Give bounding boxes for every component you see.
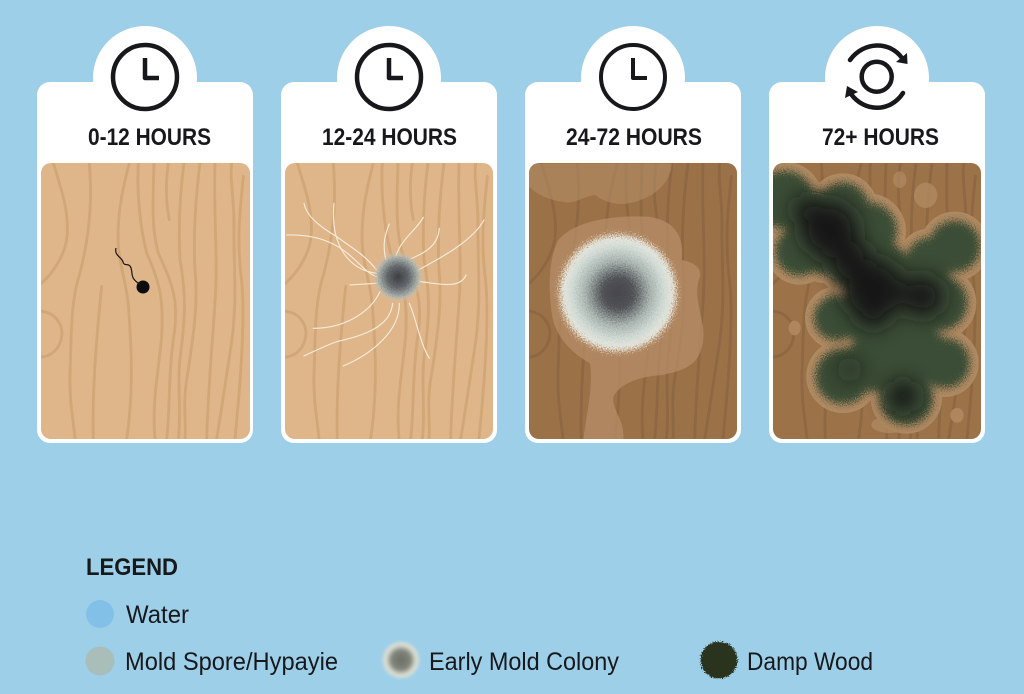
- card shape: [769, 26, 985, 443]
- heading: 12-24 HOURS: [322, 124, 457, 151]
- legend: [86, 554, 873, 678]
- card shape: [37, 26, 253, 443]
- legend item: early mold colony: [383, 642, 619, 678]
- legend heading: LEGEND: [86, 554, 178, 581]
- heading: 24-72 HOURS: [566, 124, 702, 151]
- legend item: water: Water: [126, 601, 189, 629]
- icon: clock: [357, 45, 421, 109]
- legend item: mold spore: Mold Spore/Hypayie: [125, 648, 338, 676]
- icon: clock: [113, 45, 177, 109]
- heading: 72+ HOURS: [822, 124, 939, 151]
- card shape: [281, 26, 497, 443]
- legend item: early mold colony: Early Mold Colony: [429, 648, 619, 676]
- legend item: damp wood: [700, 642, 873, 678]
- icon: clock: [601, 45, 665, 109]
- legend item: damp wood: Damp Wood: [747, 648, 873, 676]
- icon: cycle arrows: [845, 45, 908, 108]
- panel: 12-24 hours: [281, 26, 497, 443]
- card shape: [525, 26, 741, 443]
- panel: 24-72 hours: [525, 26, 741, 443]
- heading: 0-12 HOURS: [88, 124, 211, 151]
- wood panel with hyphae: [285, 163, 493, 439]
- wood panel with damp mold: [761, 163, 981, 439]
- panel: 0-12 hours: [37, 26, 253, 443]
- legend item: water: [86, 600, 189, 629]
- wood panel with spore: [41, 163, 250, 439]
- panel: 72+ hours: [761, 26, 985, 443]
- wood panel with early colony: [529, 163, 737, 439]
